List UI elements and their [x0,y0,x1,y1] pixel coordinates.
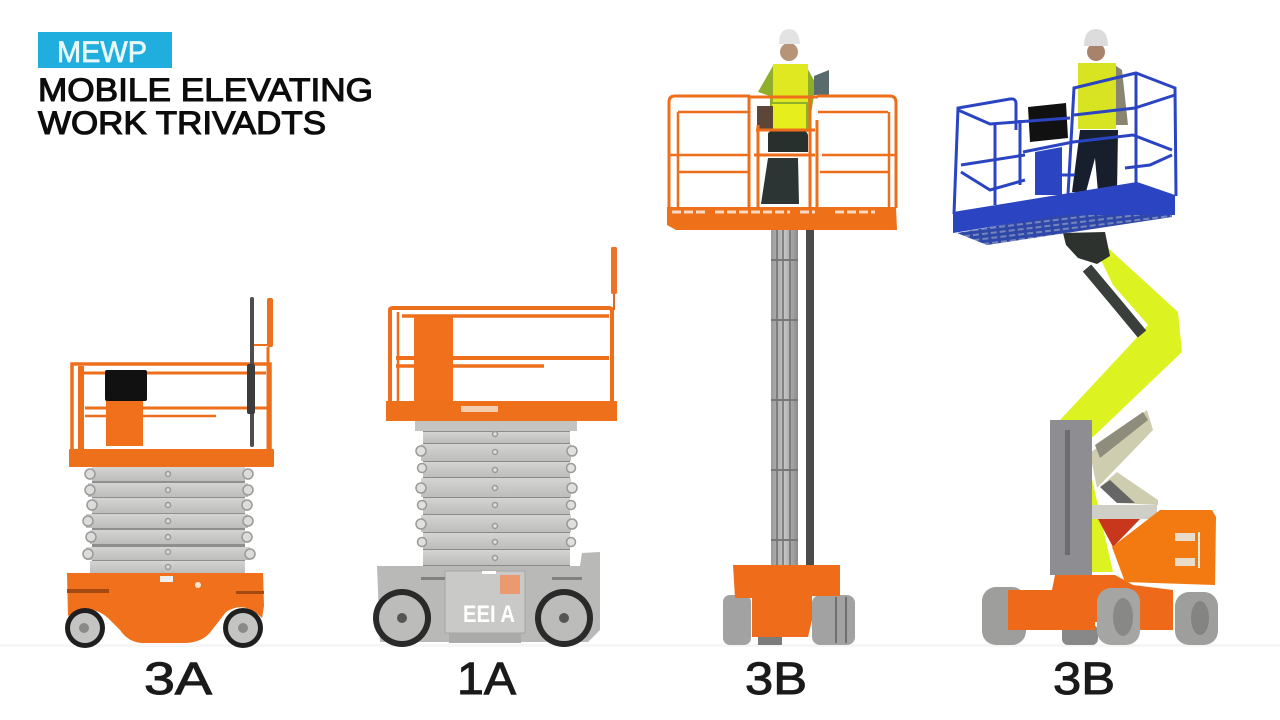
badge: MEWP: MEWP [57,36,147,69]
machine: small orange scissor lift 3A [65,297,274,648]
orange chassis [67,573,264,643]
label: 3A: 3A [144,653,212,704]
label: 3B: 3B [745,653,807,704]
wheels [373,589,593,647]
yellow upper boom [1060,247,1182,437]
wheels [982,587,1218,645]
scissor stack [83,467,255,573]
control panel [105,370,147,446]
title block [38,32,373,141]
platform deck [386,401,617,421]
grey turret column [1050,420,1092,575]
control box [1028,103,1068,142]
guard rails [390,308,612,401]
front wheels [1097,588,1209,645]
orange chassis [1008,575,1173,630]
control stick [611,247,617,310]
chassis marking: EEI A [463,601,515,628]
label: 3B right: 3B [1053,653,1115,704]
knuckle joint [1063,232,1110,264]
mast [771,230,814,566]
platform deck [69,449,274,467]
machine: vertical mast lift 3B [667,29,897,645]
machine: grey base scissor lift 1A [373,247,617,647]
yellow lower strip [1090,470,1113,572]
guard rails [954,73,1176,214]
label: 1A: 1A [457,653,516,704]
deck edge [953,182,1175,233]
machine: articulated boom lift 3B [953,29,1218,645]
wheels [723,595,855,645]
guard rails [669,96,896,208]
heading line 1: MOBILE ELEVATING [38,72,373,108]
tan link arms [1090,410,1158,547]
blue platform [953,73,1176,245]
orange base [733,565,840,637]
scissor stack [415,421,577,567]
platform deck [667,207,897,230]
wheels [65,608,263,648]
heading line 2: WORK TRIVADTS [38,105,326,141]
central panel [1035,147,1062,195]
operator [1072,29,1128,192]
orange counterweight [1112,510,1216,585]
control panel [414,317,453,401]
control mast [247,297,273,449]
guard rails [72,364,270,449]
grey chassis [377,552,600,643]
floor mesh [957,213,1172,245]
badge: MEWP [38,32,172,69]
lift cylinder [1087,268,1142,334]
operator [757,29,829,204]
